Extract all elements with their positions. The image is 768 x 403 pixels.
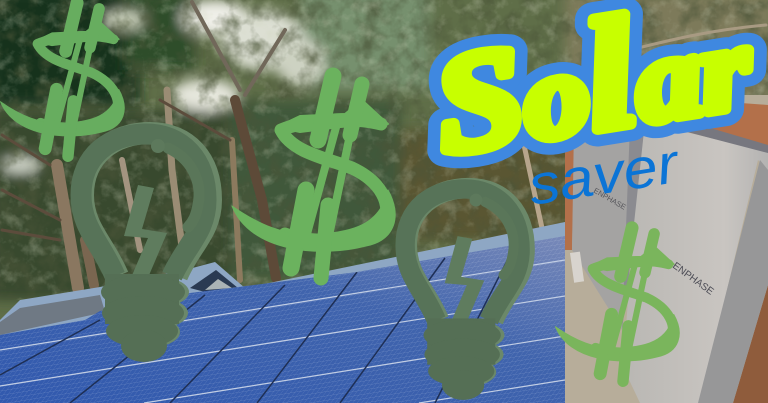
house roof with tiles and gable (0, 222, 565, 403)
solar panels (0, 230, 565, 403)
icon: light bulb, right (405, 188, 525, 400)
left battery unit (572, 125, 635, 330)
warning label (570, 252, 584, 283)
icon: dollar sign, top left (0, 3, 124, 156)
background photo: forest (0, 0, 768, 320)
right battery unit (623, 122, 768, 403)
panel photo: battery units (565, 95, 768, 403)
subtitle: saver: saver (524, 131, 685, 217)
brand labels: ENPHASE (592, 186, 628, 212)
brick wall (565, 100, 768, 250)
tree trunks (2, 2, 766, 288)
icon: dollar sign, middle (232, 76, 395, 278)
icon: dollar sign, bottom right (555, 228, 679, 381)
icon: light bulb, left (81, 133, 211, 362)
panel photo: battery units: ENPHASE (670, 261, 716, 298)
